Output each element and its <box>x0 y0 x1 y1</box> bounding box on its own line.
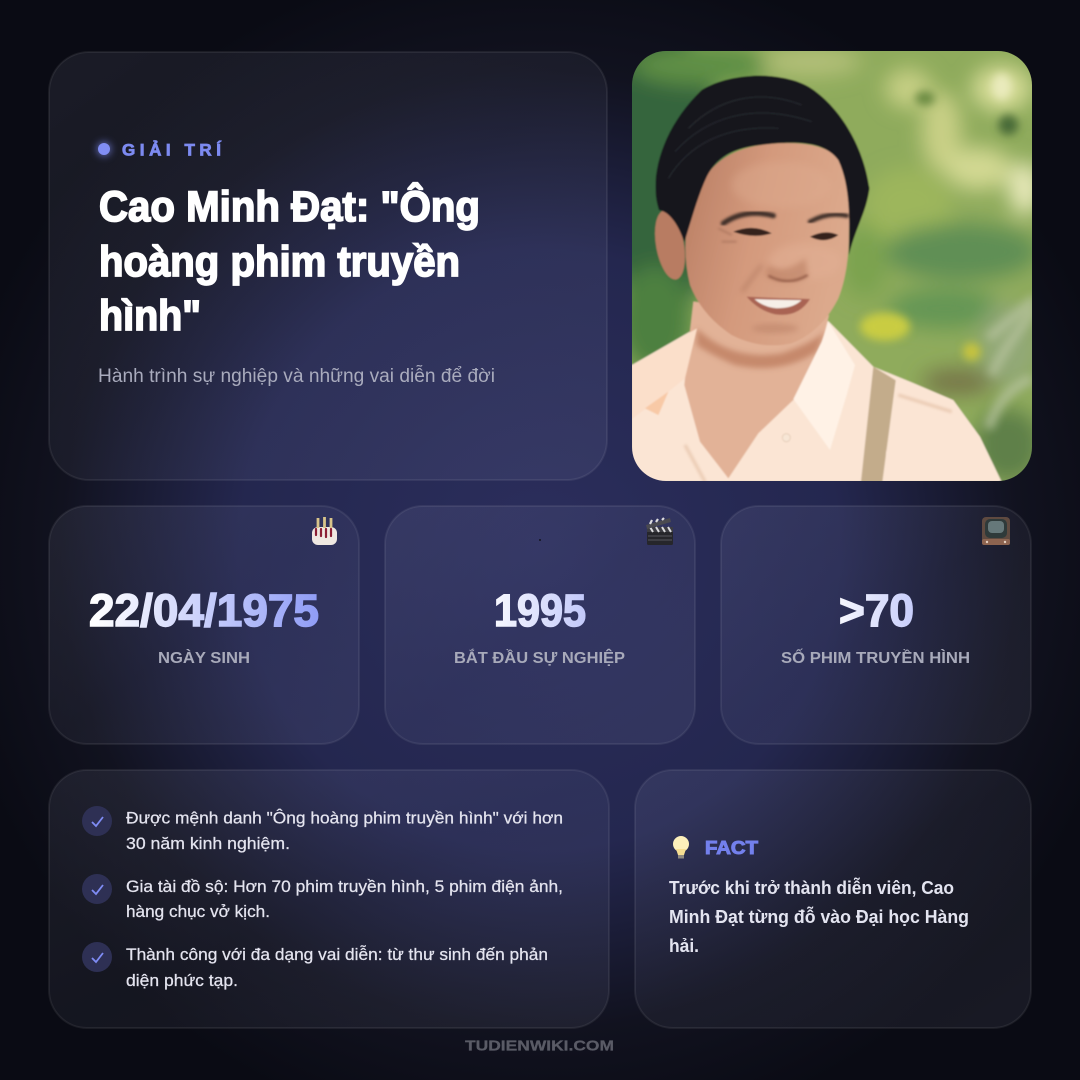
stat card: career start <box>385 506 695 744</box>
stat value: >70 <box>839 585 914 636</box>
point 2 <box>82 874 563 921</box>
fact text: Trước khi trở thành diễn viên, Cao <box>669 877 954 898</box>
stat label: NGÀY SINH <box>158 650 250 667</box>
point 3: diện phức tạp. <box>126 971 238 990</box>
point 2: Gia tài đồ sộ: Hơn 70 phim truyền hình, 5 phim điện ảnh, <box>126 877 563 896</box>
point 1: 30 năm kinh nghiệm. <box>126 834 290 853</box>
stat card: number of TV series <box>721 506 1031 744</box>
stat card: birth date <box>49 506 359 744</box>
icon: clapperboard <box>646 518 673 545</box>
title: hình" <box>99 292 201 340</box>
point 3 <box>82 942 548 990</box>
icon: television <box>982 517 1010 545</box>
fact text <box>669 877 969 956</box>
point 2: hàng chục vở kịch. <box>126 902 270 921</box>
fact text: Minh Đạt từng đỗ vào Đại học Hàng <box>669 906 969 927</box>
face <box>685 143 849 345</box>
panel: fact <box>635 770 1031 1028</box>
ear <box>654 210 686 280</box>
brows and eyes <box>723 213 773 223</box>
mouth <box>747 297 810 315</box>
title: hoàng phim truyền <box>99 238 460 286</box>
stat label: BẮT ĐẦU SỰ NGHIỆP <box>454 649 625 667</box>
point 1: Được mệnh danh "Ông hoàng phim truyền hình" với hơn <box>126 808 563 828</box>
photo: portrait of Cao Minh Đạt <box>632 51 1032 481</box>
title <box>99 182 480 340</box>
icon: birthday cake <box>312 517 337 545</box>
category tag: GIẢI TRÍ <box>122 140 222 160</box>
title: Cao Minh Đạt: "Ông <box>99 182 480 231</box>
hair <box>655 76 869 255</box>
point 1 <box>82 806 563 853</box>
collars <box>793 322 855 450</box>
panel: header <box>49 52 607 480</box>
icon: light bulb <box>673 836 689 858</box>
panel: key points <box>49 770 609 1028</box>
nose <box>766 260 809 280</box>
stat label: SỐ PHIM TRUYỀN HÌNH <box>781 649 970 667</box>
shirt <box>632 321 1002 482</box>
footer: source: TUDIENWIKI.COM <box>465 1038 614 1054</box>
fact text: hải. <box>669 935 699 956</box>
stat value: 22/04/1975 <box>89 585 319 636</box>
point 3: Thành công với đa dạng vai diễn: từ thư sinh đến phản <box>126 945 548 964</box>
stat value: 1995 <box>494 585 586 636</box>
neck <box>684 302 829 478</box>
fact heading: FACT <box>705 838 758 858</box>
subtitle: Hành trình sự nghiệp và những vai diễn để đời <box>98 365 495 387</box>
